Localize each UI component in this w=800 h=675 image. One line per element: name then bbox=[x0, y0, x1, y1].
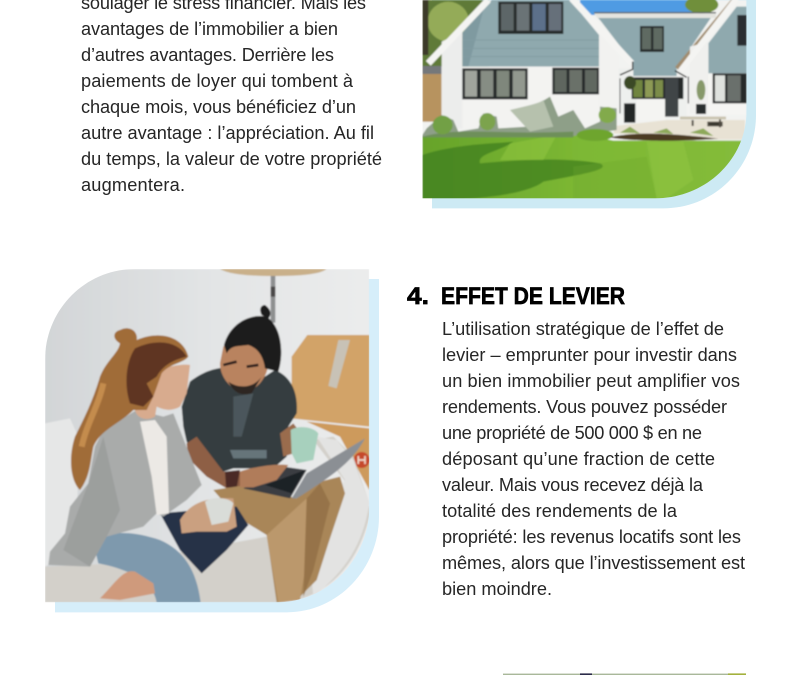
plants bbox=[422, 97, 617, 137]
man: shirt bbox=[182, 368, 297, 473]
text block: leverage paragraph: rendements. Vous pouvez posséder bbox=[442, 397, 727, 417]
man: hand on keyboard bbox=[240, 465, 288, 487]
woman: shirt bbox=[140, 420, 169, 515]
woman: face and neck bbox=[135, 365, 190, 419]
text block: appreciation paragraph: du temps, la valeur de votre propriété bbox=[81, 149, 382, 169]
text block: leverage paragraph: valeur. Mais vous recevez déjà la bbox=[442, 475, 704, 495]
heading: 4. effet de levier: 4. bbox=[407, 283, 429, 310]
lawn bbox=[422, 133, 747, 200]
text block: leverage paragraph: totalité des rendements de la bbox=[442, 501, 678, 521]
woman: foot bbox=[100, 571, 155, 600]
woman: hands and mug bbox=[180, 498, 237, 533]
text block: appreciation paragraph: autre avantage : l’appréciation. Au fil bbox=[81, 123, 374, 143]
text block: leverage paragraph: levier – emprunter pour investir dans bbox=[442, 345, 737, 365]
text block: leverage paragraph: bien moindre. bbox=[442, 579, 552, 599]
laptop bbox=[243, 467, 307, 498]
text block: leverage paragraph: un bien immobilier peut amplifier vos bbox=[442, 371, 740, 391]
woman: hair bbox=[71, 328, 188, 490]
text block: leverage paragraph: une propriété de 500 000 $ en ne bbox=[442, 423, 702, 443]
text block: appreciation paragraph bbox=[81, 0, 382, 195]
lamp bbox=[220, 269, 327, 276]
text block: leverage paragraph: L’utilisation stratégique de l’effet de bbox=[442, 319, 724, 339]
image shadow: couple photo bbox=[55, 279, 379, 612]
windows bbox=[498, 2, 563, 34]
boxes bbox=[292, 335, 369, 427]
image: house with lawn bbox=[422, 0, 756, 208]
text block: appreciation paragraph: avantages de l’immobilier a bien bbox=[81, 19, 338, 39]
text block: appreciation paragraph: chaque mois, vous bénéficiez d’un bbox=[81, 97, 356, 117]
image: next section photo top edge bbox=[503, 673, 746, 675]
text block: appreciation paragraph: d’autres avantages. Derrière les bbox=[81, 45, 334, 65]
mug: green bbox=[291, 427, 318, 463]
man: trousers bbox=[213, 477, 345, 602]
heading: 4. effet de levier: EFFET DE LEVIER bbox=[441, 283, 625, 310]
text block: leverage paragraph bbox=[442, 319, 745, 599]
text block: appreciation paragraph: paiements de loyer qui tombent à bbox=[81, 71, 354, 91]
text block: leverage paragraph: mêmes, alors que l’investissement est bbox=[442, 553, 745, 573]
image shadow: house bbox=[432, 0, 756, 208]
porch bbox=[618, 68, 687, 117]
patio and bench bbox=[613, 120, 745, 139]
man: head and hair bbox=[220, 342, 269, 392]
woman: cardigan bbox=[48, 410, 202, 567]
text block: appreciation paragraph: augmentera. bbox=[81, 175, 185, 195]
image: couple on sofa with laptop bbox=[45, 269, 379, 612]
sofa bbox=[45, 418, 78, 567]
woman: dark trousers and jeans bbox=[160, 507, 248, 573]
man: arms bbox=[186, 436, 242, 489]
text block: leverage paragraph: déposant qu’une fraction de cette bbox=[442, 449, 715, 469]
text block: leverage paragraph: propriété: les revenus locatifs sont les bbox=[442, 527, 741, 547]
